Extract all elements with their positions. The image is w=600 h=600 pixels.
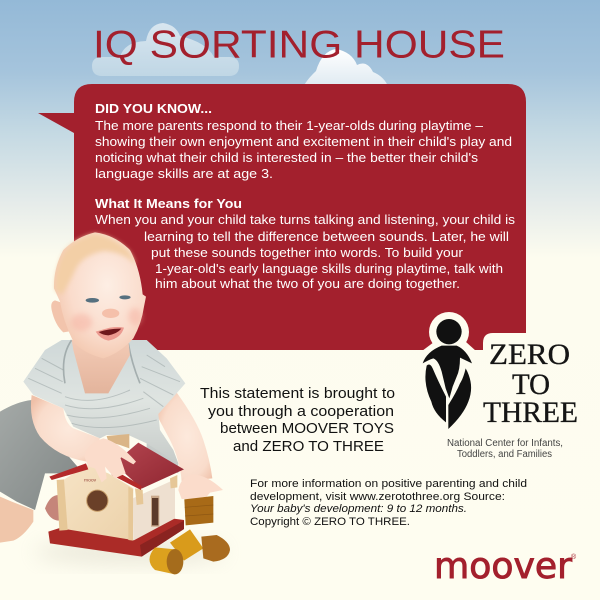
toy and hands [45, 434, 230, 574]
baby trousers [0, 400, 83, 510]
baby shirt [23, 340, 185, 463]
baby left arm [31, 395, 100, 462]
text block: what it means body: put these sounds together into words. To build your [151, 246, 463, 260]
title: IQ SORTING HOUSE [93, 24, 505, 66]
logo wordmark: THREE [483, 396, 578, 429]
house brand text: moov [84, 478, 97, 484]
more information text: development, visit www.zerotothree.org Source: [250, 491, 505, 503]
text block: did you know body: showing their own enjoyment and excitement in their child's play and [95, 135, 512, 149]
toy house [48, 443, 184, 557]
text block: what it means body: learning to tell the difference between sounds. Later, he will [144, 230, 509, 244]
house front wall [63, 465, 133, 540]
cooperation statement: and ZERO TO THREE [233, 439, 384, 455]
house chimney [107, 434, 129, 448]
cooperation statement: you through a cooperation [208, 404, 394, 420]
logo: moover: ® [571, 553, 577, 561]
baby hand on roof [84, 438, 136, 482]
logo wordmark: ZERO [489, 338, 570, 371]
logo wordmark: TO [512, 368, 550, 401]
house door [151, 496, 159, 527]
baby ear [51, 300, 72, 332]
house side wall [133, 479, 175, 541]
more information text: For more information on positive parenting and child [250, 478, 527, 490]
baby hand on block [178, 474, 223, 499]
house roof trim [49, 463, 142, 490]
heading: did you know: DID YOU KNOW... [95, 102, 212, 116]
cloud right [300, 49, 391, 96]
cooperation statement: This statement is brought to [200, 386, 395, 402]
more information text [250, 478, 527, 528]
baby with sorting house toy [0, 232, 230, 574]
panel: did you know speech bubble [38, 84, 526, 350]
logo cream halo [422, 312, 526, 352]
logo caption: Toddlers, and Families [457, 449, 552, 460]
house base [48, 518, 184, 557]
baby lower body [0, 392, 212, 543]
cloud left [92, 23, 239, 76]
baby cheeks [71, 308, 142, 331]
baby nose [102, 309, 119, 318]
wooden cylinder block [149, 547, 183, 574]
text block: did you know body: language skills are at age 3. [95, 167, 273, 181]
wooden square block [170, 529, 203, 561]
baby hair [55, 234, 136, 295]
baby right arm [157, 392, 212, 482]
logo: moover: moover [434, 546, 572, 587]
more information text: Your baby's development: 9 to 12 months. [250, 503, 467, 515]
text block: did you know body [95, 119, 512, 181]
logo caption: National Center for Infants, [447, 438, 563, 449]
text block: what it means body: 1-year-old's early language skills during playtime, talk with [155, 262, 503, 276]
text block: what it means body: him about what the two of you are doing together. [155, 277, 460, 291]
text block: did you know body: noticing what their child is interested in – the better their child's [95, 151, 478, 165]
house round hole [87, 490, 108, 511]
baby foot [0, 497, 33, 543]
baby face [54, 232, 146, 358]
text block: what it means body [95, 213, 515, 291]
baby torso [23, 340, 185, 473]
logo: zero to three [422, 312, 578, 460]
baby mouth [96, 327, 124, 341]
wooden cube block [184, 496, 213, 525]
text block: what it means body: When you and your child take turns talking and listening, your child is [95, 213, 515, 227]
logo caption [447, 438, 563, 460]
house wall posts [57, 475, 177, 541]
heading: what it means for you: What It Means for You [95, 197, 242, 211]
toy shadow [35, 540, 225, 564]
shirt stripes [28, 355, 180, 428]
shirt collar folds [63, 340, 140, 383]
logo wordmark [483, 338, 578, 429]
baby head [51, 232, 146, 358]
baby neck and chest [72, 340, 130, 393]
text block: did you know body: The more parents respond to their 1-year-olds during playtime – [95, 119, 483, 133]
cooperation statement [200, 386, 395, 455]
trousers behind toy [147, 435, 178, 473]
logo figure and hands [423, 319, 472, 429]
cooperation statement: between MOOVER TOYS [220, 421, 394, 437]
house roof [114, 443, 184, 489]
far foot [45, 495, 59, 521]
baby eyes [86, 295, 131, 303]
wooden rounded block [201, 535, 230, 562]
more information text: Copyright © ZERO TO THREE. [250, 516, 410, 528]
